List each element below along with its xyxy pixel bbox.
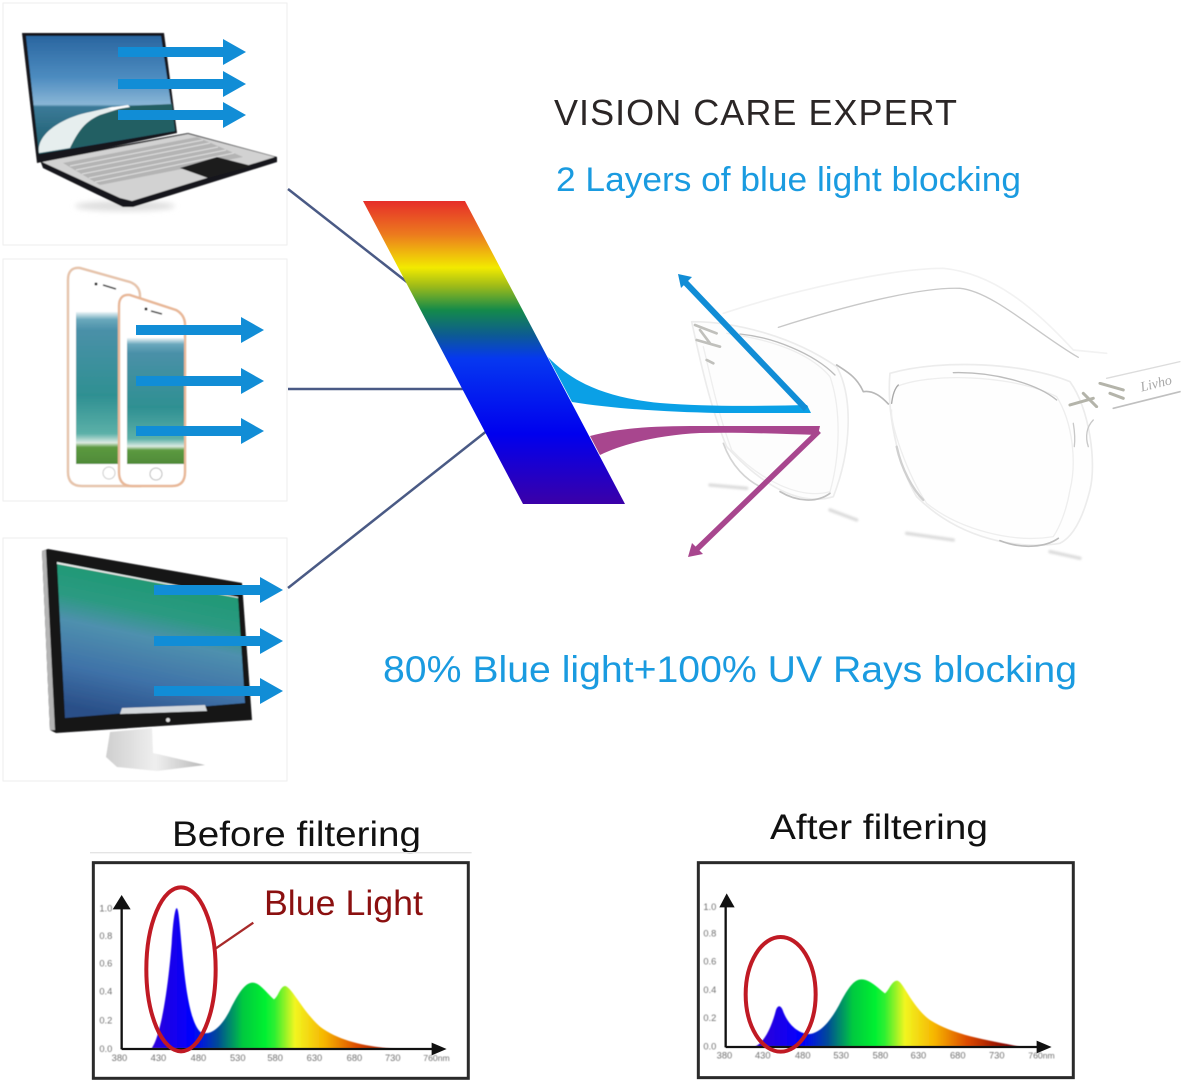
panel: phones — [3, 259, 287, 501]
tick labels: 630 — [307, 1053, 322, 1063]
subtitle: layers: 2 Layers of blue light blocking — [556, 161, 1021, 199]
glasses right lens rim — [889, 364, 1093, 546]
heading: after filtering: After filtering — [770, 808, 988, 847]
tick labels: 0.4 — [703, 985, 716, 995]
glasses temples — [723, 268, 1180, 408]
tick labels: 1.0 — [99, 903, 112, 913]
tick labels: 530 — [230, 1053, 246, 1063]
ray: blue light reflected — [548, 274, 811, 413]
tick labels: 480 — [191, 1053, 206, 1063]
glasses right hinge — [1070, 383, 1123, 407]
tick labels — [703, 902, 1055, 1061]
axes — [113, 895, 447, 1055]
tick labels: 730 — [989, 1051, 1005, 1061]
glasses left lens rim — [692, 322, 848, 500]
tick labels: 380 — [717, 1051, 732, 1061]
rainbow light filter band — [363, 201, 625, 504]
tick labels: 0.6 — [99, 959, 112, 969]
icon: phones — [68, 268, 185, 486]
chart: before filtering spectrum — [90, 853, 472, 1078]
tick labels: 430 — [755, 1051, 771, 1061]
callout label: Blue Light — [264, 884, 423, 923]
tick labels: 0.0 — [703, 1042, 716, 1052]
subtitle: blocking rates: 80% Blue light+100% UV Rays blocking — [383, 649, 1077, 690]
tick labels: 760nm — [1028, 1051, 1055, 1061]
chart: after filtering spectrum — [698, 863, 1073, 1078]
tick labels: 760nm — [423, 1053, 450, 1063]
highlight ellipse — [746, 937, 816, 1052]
tick labels: 680 — [347, 1053, 362, 1063]
tick labels: 580 — [267, 1053, 283, 1063]
tick labels: 380 — [112, 1053, 127, 1063]
tick labels: 680 — [950, 1051, 966, 1061]
title: VISION CARE EXPERT — [554, 92, 957, 133]
ray: UV reflected — [590, 426, 820, 557]
tick labels: 0.4 — [99, 987, 112, 997]
glasses temple script: Livho — [1138, 373, 1174, 396]
axes — [719, 893, 1052, 1053]
tick labels: 480 — [795, 1051, 811, 1061]
glasses left end piece — [695, 325, 720, 363]
callout line — [216, 923, 253, 948]
tick labels: 530 — [833, 1051, 849, 1061]
tick labels: 0.2 — [703, 1013, 716, 1023]
tick labels: 0.6 — [703, 956, 716, 966]
tick labels: 1.0 — [703, 902, 716, 912]
glasses bridge — [837, 365, 888, 404]
icon: laptop — [22, 33, 277, 211]
arrows: phone light rays — [136, 317, 264, 444]
glasses shadows — [710, 485, 1080, 558]
tick labels: 0.2 — [99, 1016, 112, 1026]
arrows: laptop light rays — [118, 39, 246, 128]
highlight ellipse — [146, 887, 216, 1051]
glasses photo — [692, 268, 1180, 558]
tick labels: 580 — [873, 1051, 888, 1061]
tick labels: 0.0 — [99, 1044, 112, 1054]
arrows: monitor light rays — [154, 577, 283, 704]
icon: monitor — [42, 549, 252, 771]
panel: monitor — [3, 538, 287, 781]
tick labels: 0.8 — [703, 928, 716, 938]
heading: before filtering: Before filtering — [172, 815, 421, 854]
spectrum curve after — [755, 979, 1020, 1047]
tick labels: 0.8 — [99, 931, 112, 941]
tick labels — [99, 903, 450, 1063]
connector lines from devices to filter — [288, 189, 488, 588]
panel: laptop — [3, 3, 287, 245]
spectrum curve before — [152, 908, 397, 1049]
tick labels: 730 — [385, 1053, 401, 1063]
tick labels: 430 — [151, 1053, 166, 1063]
tick labels: 630 — [911, 1051, 926, 1061]
